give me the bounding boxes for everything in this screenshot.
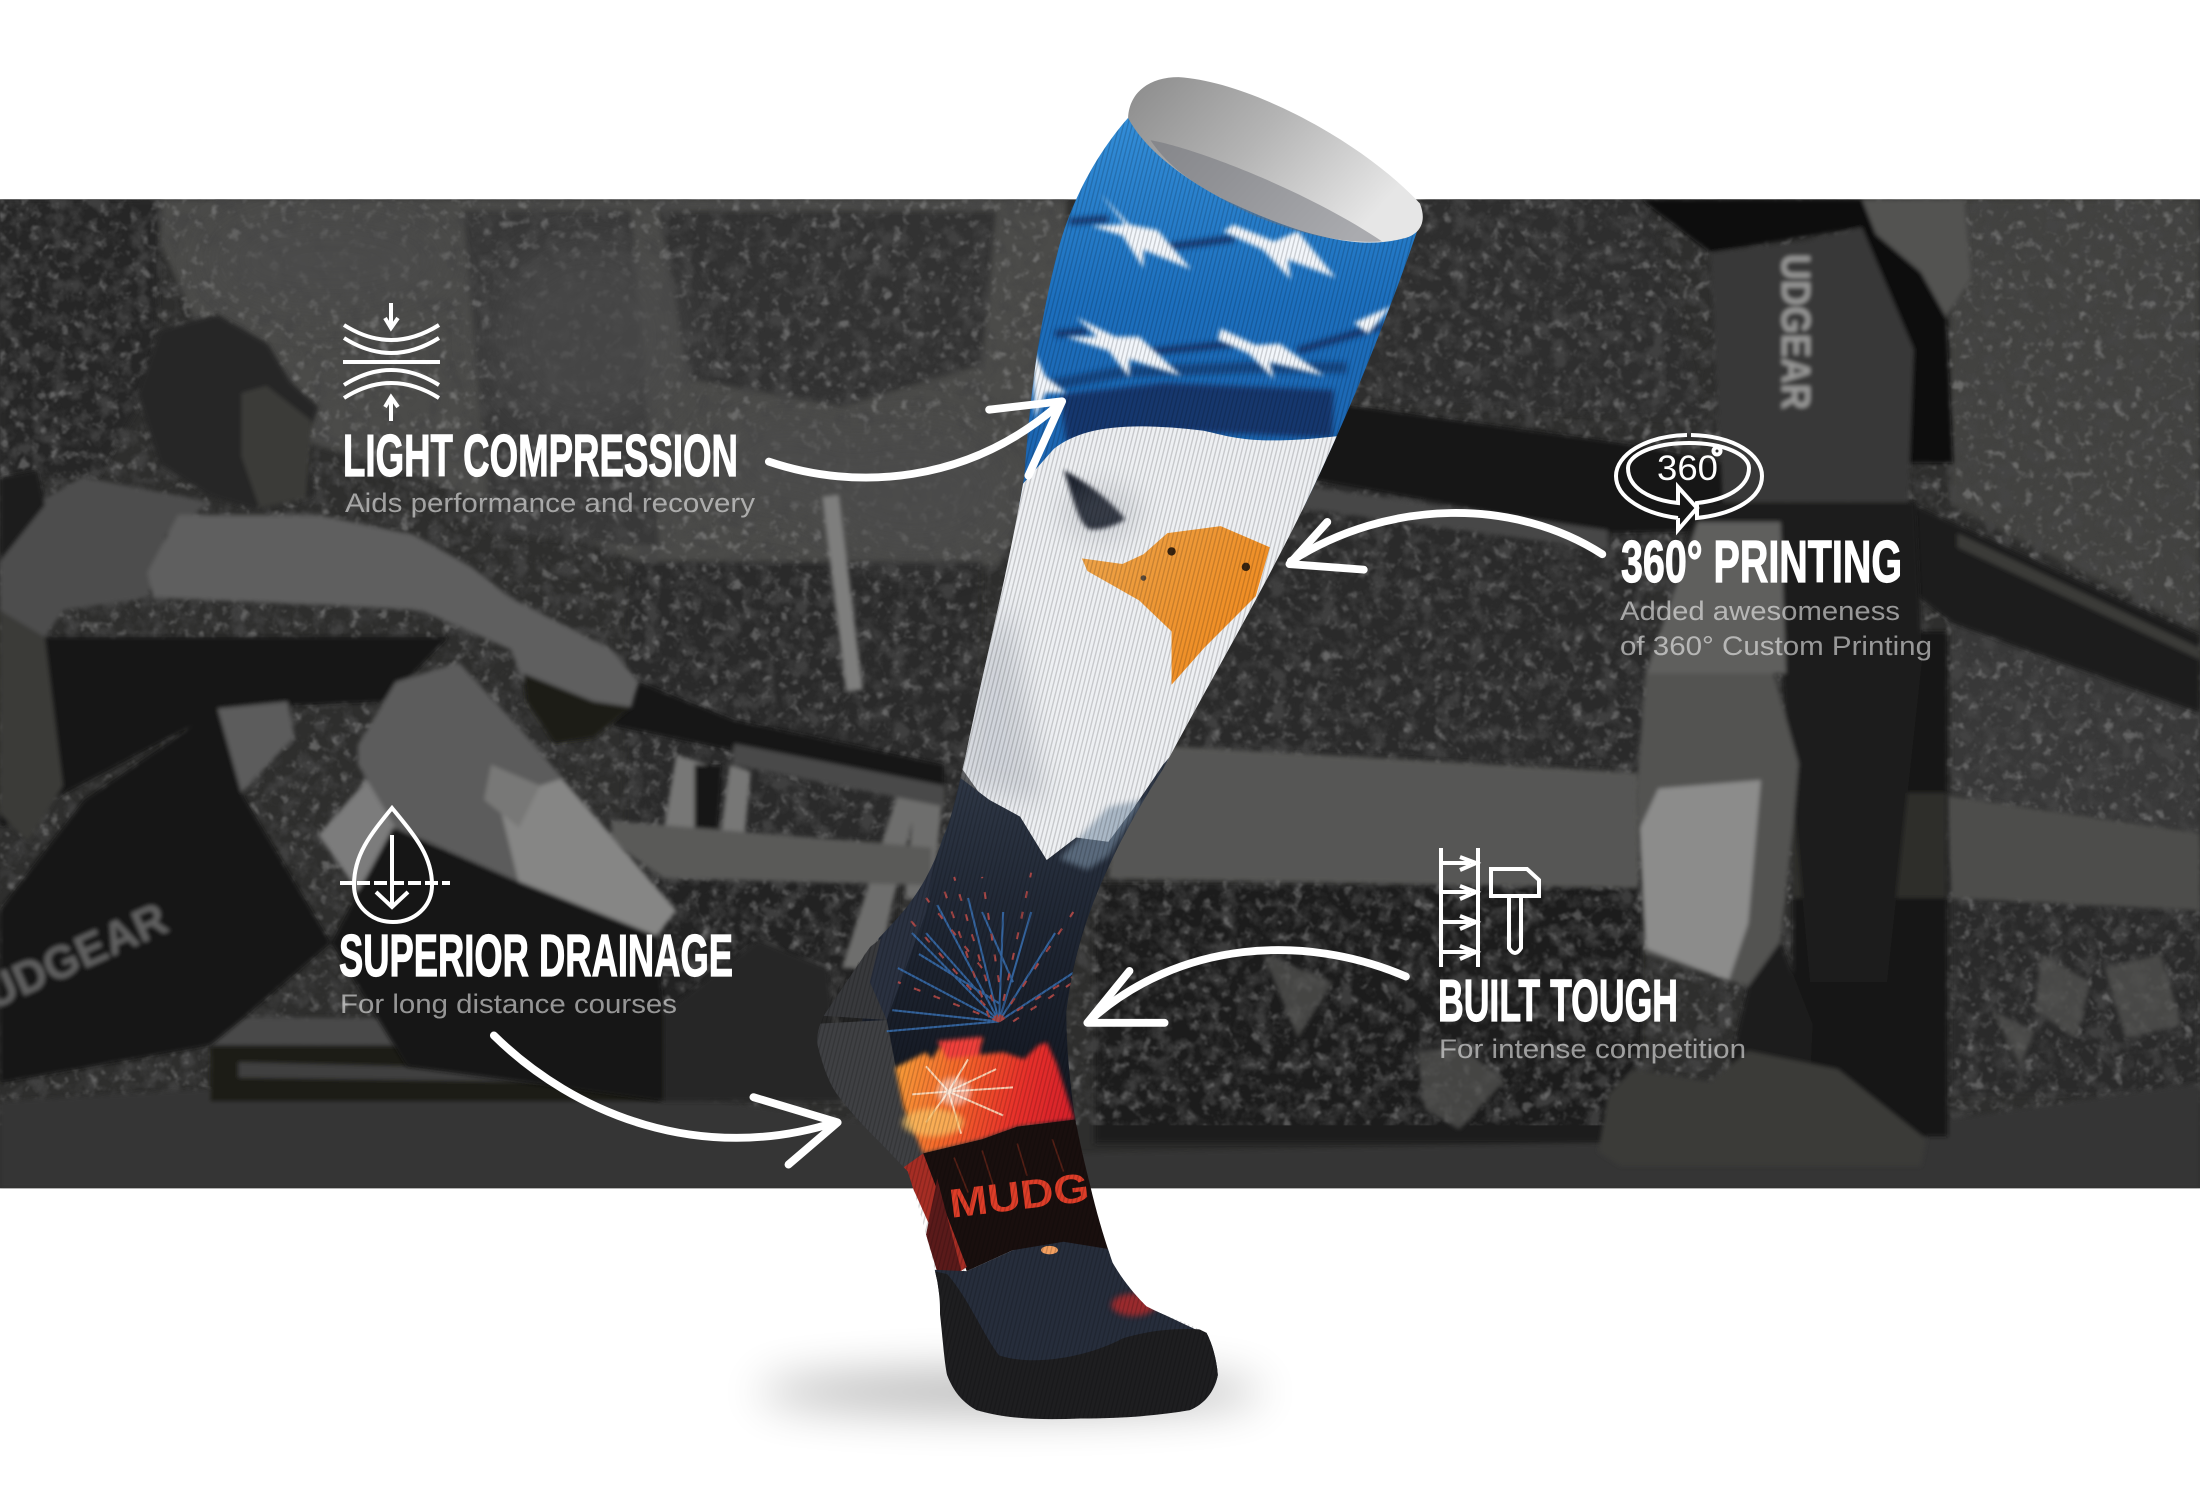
icon number: 360 <box>1657 449 1718 488</box>
sock opening <box>1128 77 1423 243</box>
heading: LIGHT COMPRESSION <box>343 423 738 489</box>
fireworks burst <box>887 873 1087 1031</box>
feature: superior drainage <box>339 808 733 1019</box>
icon: 360 rotation <box>1616 435 1762 530</box>
description line two: of 360° Custom Printing <box>1620 631 1932 661</box>
arrow: superior drainage <box>494 1035 838 1165</box>
description: Aids performance and recovery <box>345 488 756 518</box>
dark navy streaks <box>1045 219 1382 418</box>
feature: built tough <box>1438 848 1746 1064</box>
eagle beak <box>1082 526 1270 685</box>
icon: reinforced wall and hammer <box>1441 848 1539 967</box>
black sole and toe <box>926 1270 1235 1431</box>
leaves, lower right <box>1263 954 2182 1129</box>
heading: 360° PRINTING <box>1621 529 1902 595</box>
dark lower leg <box>846 756 1170 1122</box>
floor shadow <box>758 1372 1263 1411</box>
seated runner, left <box>0 314 842 1101</box>
bridge rail and posts, left <box>612 495 944 968</box>
description: For long distance courses <box>340 989 677 1019</box>
arrow: 360 printing <box>1289 513 1602 570</box>
arrow: light compression <box>769 401 1062 478</box>
sock product image: MUDG <box>947 1164 1092 1227</box>
heading: BUILT TOUGH <box>1438 968 1678 1034</box>
stars on blue cuff <box>1031 194 1392 418</box>
wooden plank, right <box>1108 744 2200 911</box>
white head <box>954 426 1347 860</box>
icon: compression <box>343 303 440 421</box>
red explosion <box>895 1037 1075 1153</box>
standing runner, right <box>1598 199 1971 1166</box>
description: Added awesomeness <box>1620 596 1900 626</box>
wooden rail, right <box>1299 404 2200 713</box>
arrow: built tough <box>1087 950 1406 1023</box>
description: For intense competition <box>1439 1034 1746 1064</box>
sock product image <box>758 56 1459 1459</box>
standing runner, right: UDGEAR <box>1773 254 1819 410</box>
heading: SUPERIOR DRAINAGE <box>339 923 733 989</box>
navy foot <box>933 1242 1218 1410</box>
photo band: runners on a wooden bridge <box>0 199 2200 1188</box>
heel panels <box>817 860 934 1167</box>
eagle eye <box>1064 470 1125 529</box>
dark band with logo <box>923 1120 1115 1271</box>
open sky between the trees <box>210 210 1010 554</box>
icon: water drop <box>340 808 450 922</box>
feature: 360 printing <box>1616 435 1932 661</box>
boardwalk ground <box>0 1017 2200 1188</box>
feature: light compression <box>343 303 756 518</box>
